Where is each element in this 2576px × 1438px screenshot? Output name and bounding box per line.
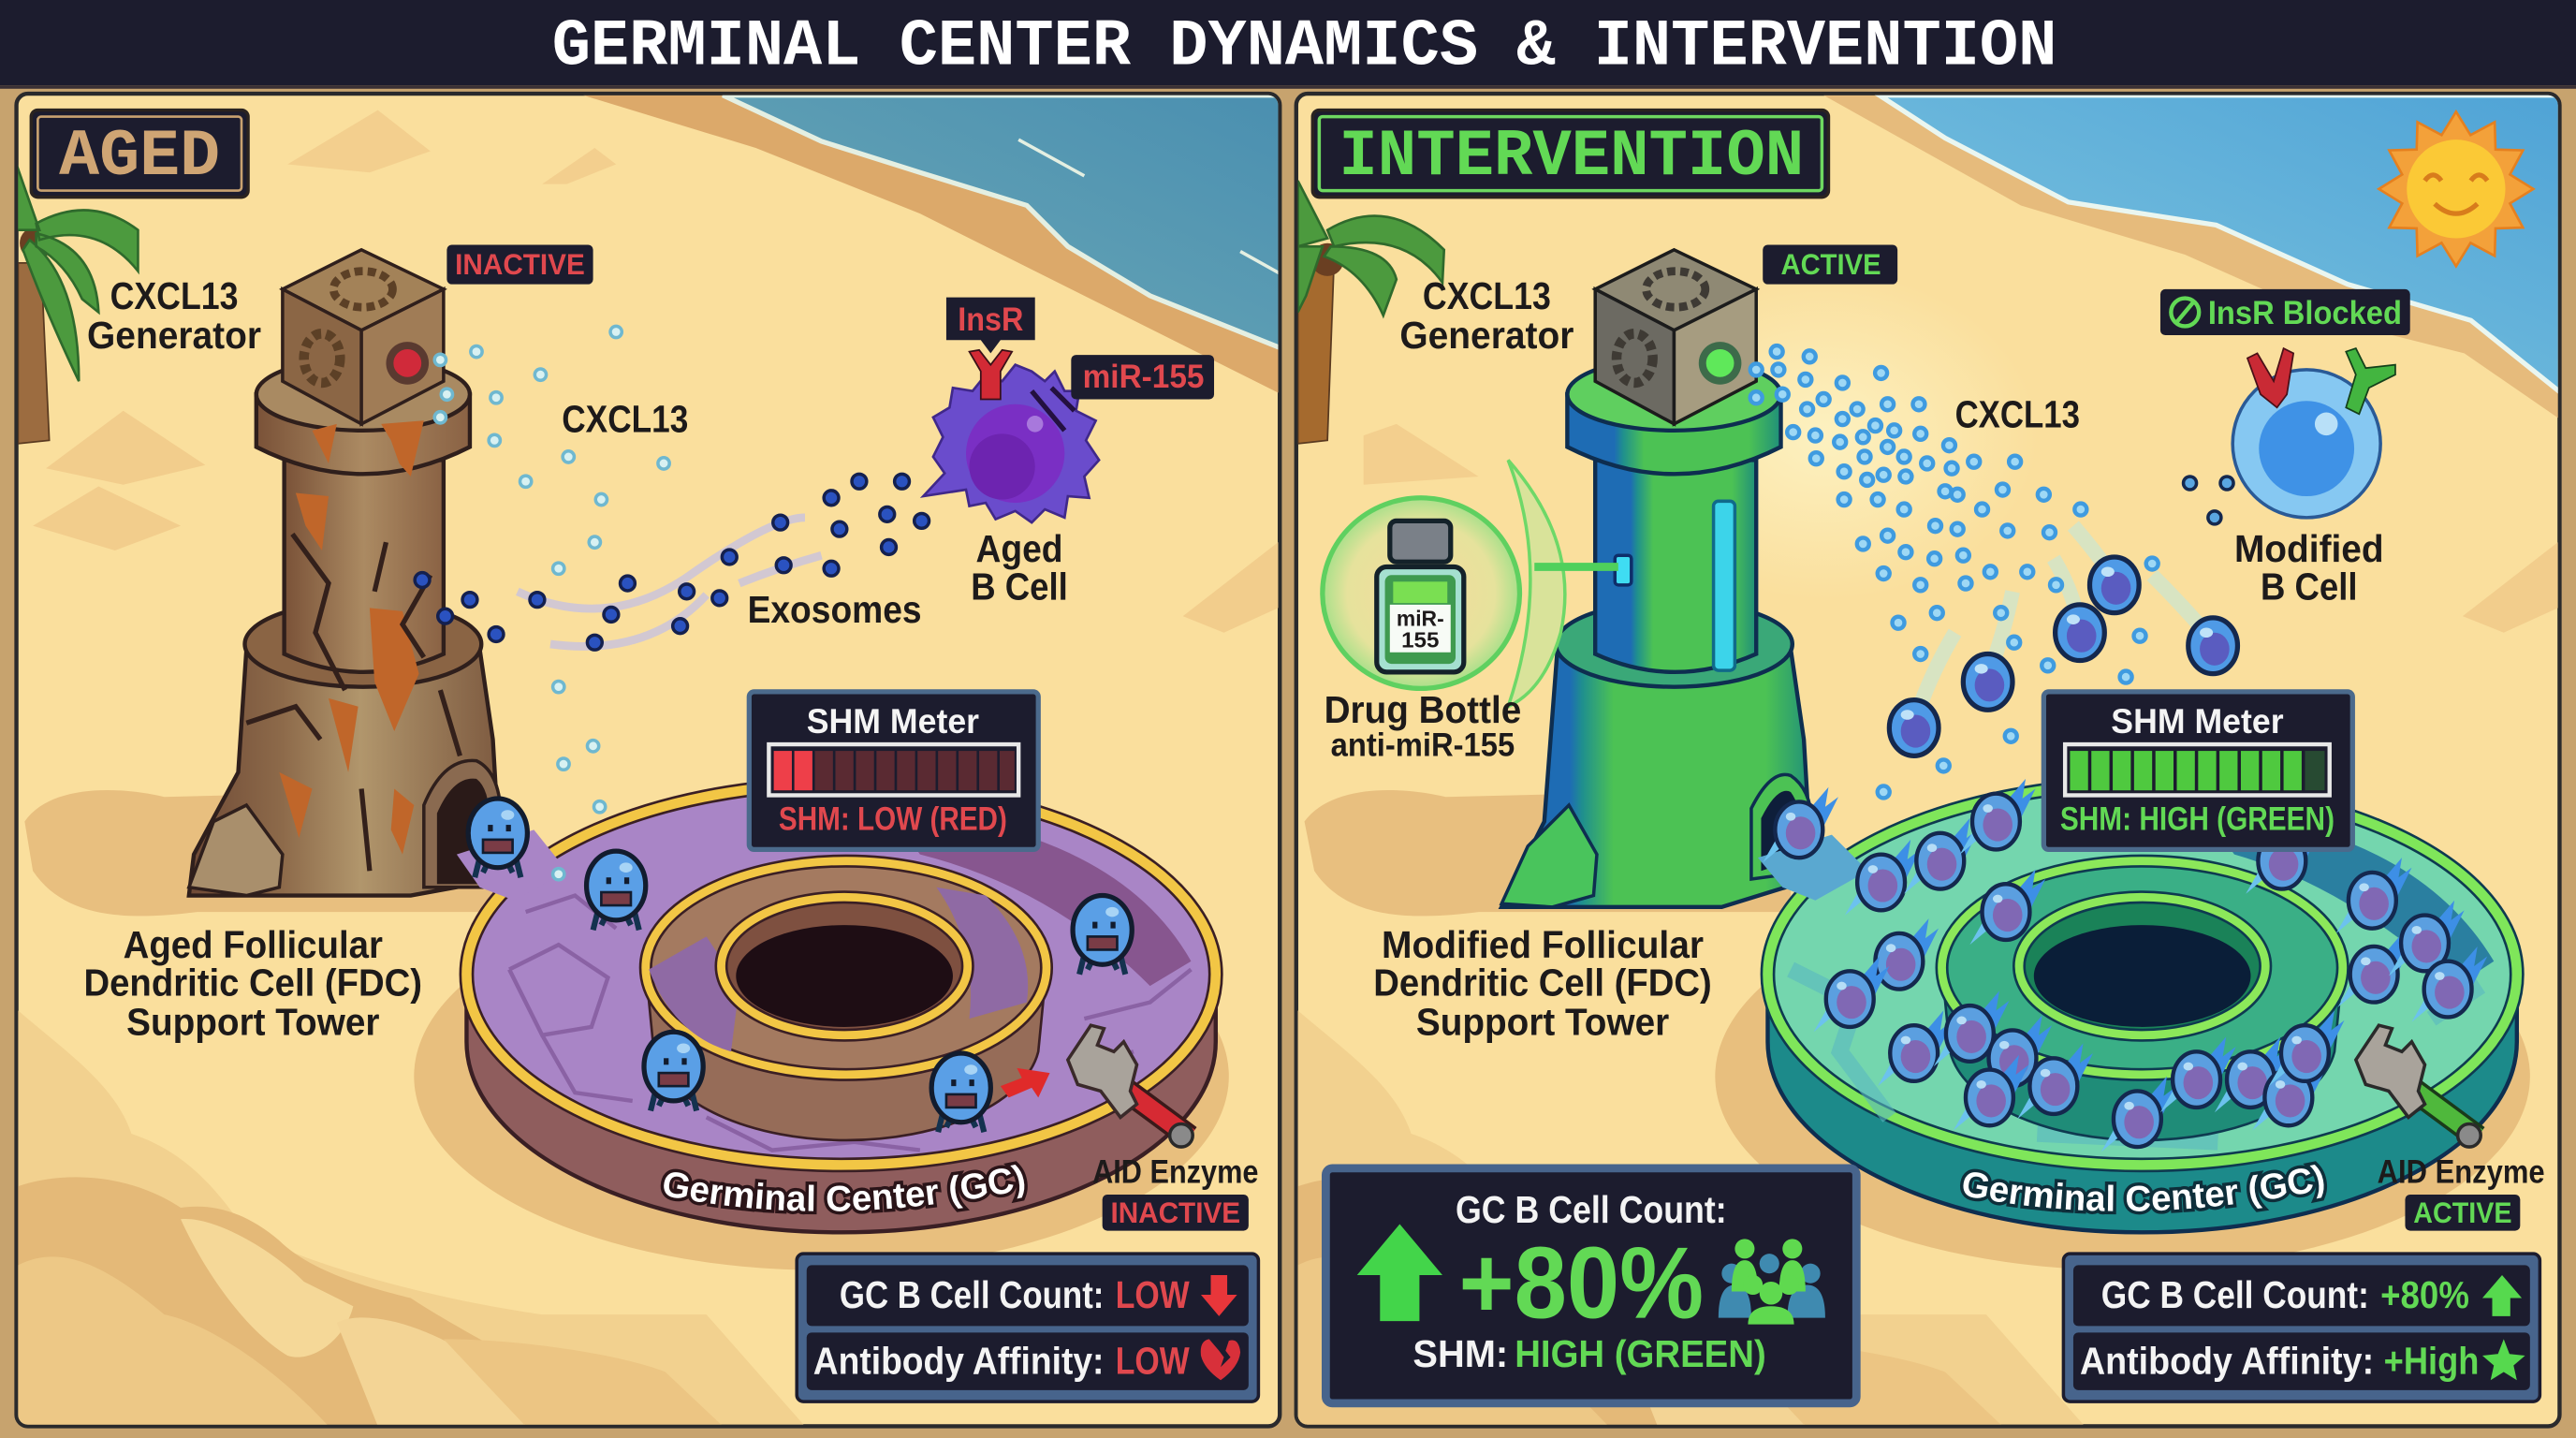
icon: star (2482, 1339, 2525, 1380)
label: FDC tower (1373, 923, 1712, 1044)
palm tree (1298, 181, 1444, 444)
aged tower (189, 250, 501, 896)
panel: intervention (1294, 92, 2562, 1429)
germinal center: aged (457, 784, 1216, 1232)
SHM meter: intervention: SHM: HIGH (GREEN) (2060, 800, 2334, 837)
AID enzyme label: aged: AID Enzyme (1092, 1154, 1258, 1191)
icon: sun (2378, 111, 2533, 266)
badge: InsR blocked: InsR Blocked (2208, 295, 2402, 331)
icon: down arrow (1201, 1275, 1237, 1316)
tower base (189, 649, 501, 896)
foot (189, 805, 283, 896)
badge: aged (31, 110, 248, 198)
central hole (2034, 925, 2250, 1027)
label: aged B cell: B Cell (971, 565, 1068, 609)
aged B cell (923, 350, 1099, 522)
door (1751, 774, 1812, 879)
stats panel: aged: LOW (1116, 1273, 1190, 1316)
badge: InsR: InsR (958, 301, 1023, 338)
critters (468, 799, 527, 877)
title: GERMINAL CENTER DYNAMICS & INTERVENTION (552, 10, 2056, 84)
InsR receptor (970, 350, 1012, 399)
AID enzyme label: intervention: AID Enzyme (2378, 1154, 2545, 1191)
floor (466, 784, 1216, 1165)
label: FDC tower: Modified Follicular (1382, 923, 1704, 966)
generator cube (1595, 250, 1756, 424)
palm tree (17, 165, 138, 444)
icon: people (1719, 1239, 1825, 1325)
icon: broken heart (1201, 1339, 1240, 1380)
stats panel: aged: LOW (1116, 1339, 1190, 1382)
label: FDC tower: Dendritic Cell (FDC) (1373, 961, 1712, 1005)
label: FDC tower (84, 923, 422, 1044)
SHM meter: aged: SHM: LOW (RED) (779, 800, 1007, 837)
label: CXCL13: CXCL13 (1955, 392, 2080, 435)
label: generator: Generator (87, 314, 261, 357)
label: exosomes: Exosomes (748, 588, 922, 631)
central hole (736, 925, 953, 1027)
badge: InsR blocked (2160, 289, 2410, 335)
shaft (1595, 460, 1756, 672)
outer wall (1767, 975, 2517, 1232)
label: germinal center: Germinal Center (GC) (661, 1161, 1028, 1215)
SHM meter: aged (749, 692, 1038, 849)
label: generator (87, 274, 261, 357)
label: CXCL13: CXCL13 (562, 398, 688, 441)
badge: intervention: INTERVENTION (1339, 121, 1804, 195)
label: generator: CXCL13 (1423, 274, 1551, 317)
floor entry (1758, 835, 1868, 901)
AID enzyme label: aged (1092, 1154, 1258, 1231)
badge: aged: AGED (59, 121, 220, 195)
icon: up arrow (2482, 1275, 2522, 1316)
title bar (0, 0, 2576, 89)
stats panel: aged: Antibody Affinity: (813, 1339, 1104, 1382)
label: FDC tower: Support Tower (126, 1001, 380, 1044)
icon: up arrow (1357, 1225, 1442, 1321)
label: modified B cell (2234, 527, 2384, 609)
stats panel: intervention: +High (2384, 1339, 2479, 1382)
floor cracks (509, 896, 1191, 1151)
badge: InsR (946, 298, 1035, 353)
red receptor (2247, 348, 2293, 407)
collar (256, 394, 470, 474)
wrench (2356, 1025, 2481, 1147)
badge: active (1763, 245, 1897, 285)
inner raised ring (1942, 968, 2343, 1140)
red arrow (1001, 1068, 1050, 1097)
stats panel: intervention (2063, 1254, 2539, 1401)
label: modified B cell: B Cell (2261, 565, 2358, 609)
floor entry (457, 829, 567, 901)
foot (1501, 805, 1597, 907)
shaft (285, 460, 444, 672)
label guide arcs (661, 1180, 2367, 1211)
door (424, 760, 501, 888)
SHM meter: aged: SHM Meter (807, 702, 979, 741)
exosomes (415, 474, 929, 650)
outer wall (466, 975, 1216, 1232)
germinal center: intervention (1758, 779, 2517, 1232)
bottle cap (1390, 521, 1451, 562)
green receptor (2346, 348, 2395, 414)
green light (1699, 342, 1741, 385)
stats panel: intervention: GC B Cell Count: (2101, 1273, 2369, 1316)
big stats panel: SHM: (1412, 1332, 1508, 1375)
drug bottle (1323, 460, 1618, 707)
label: drug bottle (1325, 688, 1521, 763)
label: FDC tower: Support Tower (1416, 1001, 1669, 1044)
exosome trails (518, 518, 822, 646)
bottle label (1390, 605, 1451, 653)
label: FDC tower: Dendritic Cell (FDC) (84, 961, 422, 1005)
floor (1767, 784, 2517, 1165)
wrench (1068, 1025, 1193, 1147)
rust and cracks (279, 420, 424, 855)
SHM meter: intervention (2043, 692, 2352, 849)
red light (386, 342, 429, 385)
big stats panel: HIGH (GREEN) (1515, 1332, 1766, 1375)
shield arc (1508, 460, 1565, 707)
tower base (1501, 649, 1812, 907)
meter segments (774, 751, 1015, 790)
inner raised ring (646, 968, 1046, 1140)
big stats panel (1325, 1168, 1856, 1403)
big stats panel: GC B Cell Count: (1456, 1188, 1727, 1231)
label: aged B cell: Aged (976, 527, 1063, 570)
incoming B cells (1889, 557, 2237, 756)
badge: miR-155: miR-155 (1083, 359, 1204, 395)
label: modified B cell: Modified (2234, 527, 2384, 570)
label: drug bottle: Drug Bottle (1325, 688, 1521, 731)
modified B cell (2184, 348, 2395, 524)
label: generator: Generator (1399, 314, 1574, 357)
label: generator (1399, 274, 1574, 357)
stats panel: aged (797, 1254, 1258, 1401)
AID enzyme label: intervention (2378, 1154, 2545, 1231)
bottle body (1377, 567, 1464, 672)
label: aged B cell (971, 527, 1068, 609)
generator cube (283, 250, 444, 424)
label: generator: CXCL13 (110, 274, 238, 317)
stats panel: aged: GC B Cell Count: (840, 1273, 1104, 1316)
panel: aged (14, 92, 1282, 1429)
label: germinal center: Germinal Center (GC) (1960, 1161, 2327, 1215)
beach and ocean: intervention (1298, 95, 2563, 1426)
stats panel: intervention: Antibody Affinity: (2080, 1339, 2374, 1382)
AID enzyme label: intervention: ACTIVE (2413, 1196, 2512, 1229)
beach and ocean: aged (18, 95, 1281, 1426)
halo (1323, 498, 1519, 688)
nozzle gem (1615, 555, 1632, 585)
AID enzyme label: aged: INACTIVE (1110, 1196, 1240, 1229)
SHM meter: intervention: SHM Meter (2111, 702, 2284, 741)
swarm of B cells (1763, 779, 2487, 1152)
label: FDC tower: Aged Follicular (124, 923, 383, 966)
intervention tower (1501, 250, 1812, 907)
drug bottle: miR- (1397, 607, 1444, 631)
coolant window (1714, 501, 1734, 670)
CXCL13 particles (434, 326, 669, 880)
+80%: +80% (1459, 1226, 1704, 1341)
label: drug bottle: anti-miR-155 (1331, 726, 1515, 763)
stats panel: intervention: +80% (2380, 1273, 2469, 1316)
particle trails (1914, 526, 2213, 723)
meter segments (2070, 751, 2324, 790)
CXCL13 particles (1750, 345, 2159, 798)
badge: inactive: INACTIVE (455, 247, 585, 281)
badge: active: ACTIVE (1781, 247, 1881, 281)
drug bottle: 155 (1401, 628, 1440, 653)
collar (1567, 394, 1781, 474)
exosomes (2184, 477, 2233, 524)
